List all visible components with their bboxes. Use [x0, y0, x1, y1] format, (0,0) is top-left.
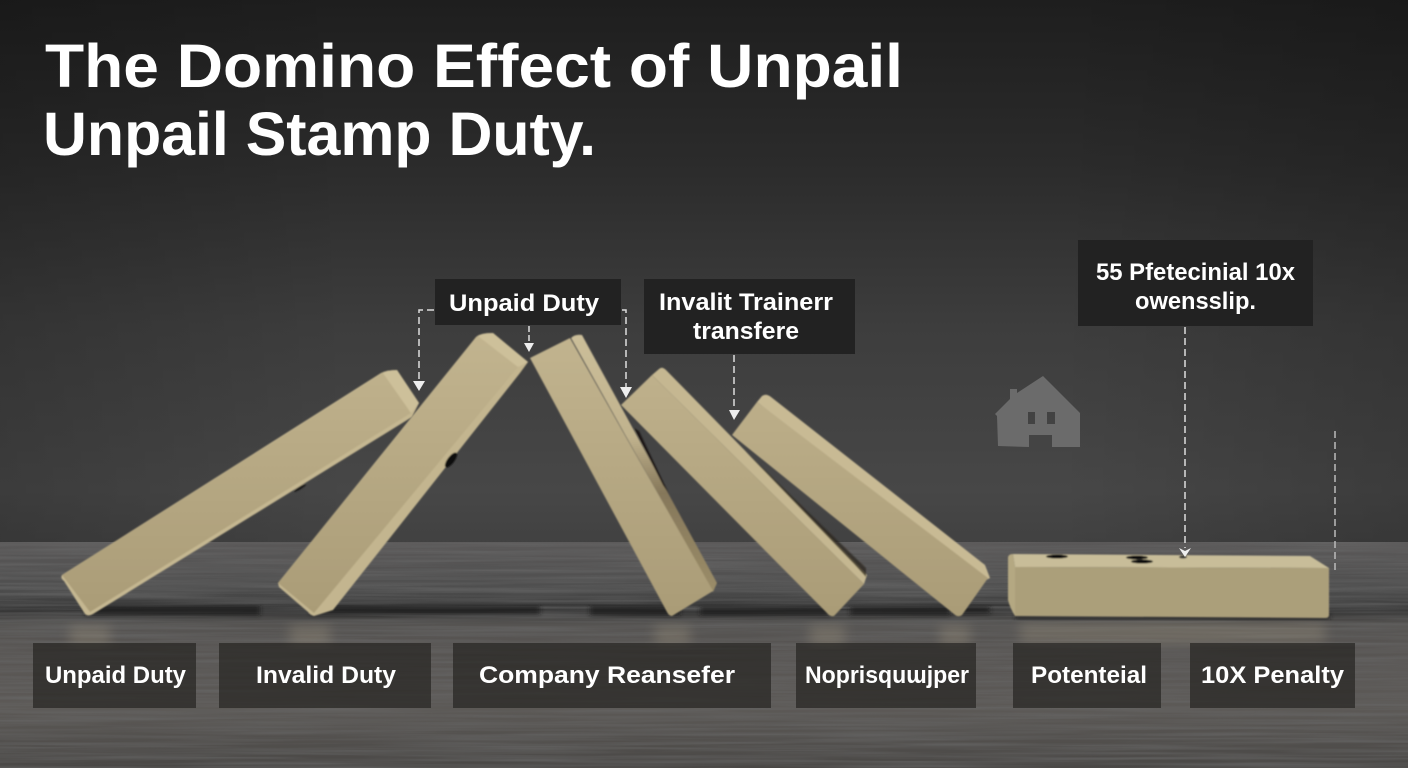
- title: Unpail Stamp Duty.: [43, 100, 596, 168]
- callout: 55 Pfetecinial 10x owensslip: owensslip.: [1135, 288, 1256, 315]
- label: Potenteial: [1013, 643, 1161, 708]
- title: The Domino Effect of Unpail: [45, 32, 903, 100]
- domino 2: [278, 333, 528, 616]
- callout: Invalit Trainerr transfere: Invalit Trainerr: [659, 289, 833, 316]
- label: Company Reansefer: Company Reansefer: [479, 662, 735, 689]
- label: 10X Penalty: 10X Penalty: [1201, 662, 1345, 689]
- callout: 55 Pfetecinial 10x owensslip: [1078, 240, 1313, 326]
- label: Unpaid Duty: [33, 643, 196, 708]
- label: Potenteial: Potenteial: [1031, 662, 1147, 689]
- arrow: callout to flat domino: [1179, 327, 1191, 557]
- domino 5: [732, 395, 990, 616]
- dashed marker line: [1334, 431, 1336, 571]
- arrow: callout to domino 5: [729, 355, 740, 420]
- title: [43, 32, 903, 168]
- label: Company Reansefer: [453, 643, 771, 708]
- table surface: [0, 542, 1408, 768]
- domino 4: [621, 368, 867, 616]
- callout: 55 Pfetecinial 10x owensslip: 55 Pfetecinial 10x: [1096, 259, 1296, 286]
- arrow: callout to domino 2: [524, 326, 534, 352]
- label: 10X Penalty: [1190, 643, 1355, 708]
- label: Invalid Duty: [219, 643, 431, 708]
- callout: Unpaid Duty: [435, 279, 621, 325]
- callout: Unpaid Duty: Unpaid Duty: [449, 290, 600, 317]
- background wall: [0, 0, 1408, 545]
- callout: Invalit Trainerr transfere: [644, 279, 855, 354]
- label: Unpaid Duty: Unpaid Duty: [45, 662, 187, 689]
- domino reflections on table: [70, 623, 1325, 647]
- domino shadows on table: [85, 606, 1330, 619]
- label: Noprisquɯjper: Noprisquɯjper: [805, 662, 969, 689]
- flat domino: [1008, 554, 1329, 618]
- domino 3: [530, 335, 717, 616]
- label: Noprisquɯjper: [796, 643, 976, 708]
- callout: Invalit Trainerr transfere: transfere: [693, 318, 799, 345]
- domino 1: [61, 370, 419, 616]
- arrow: callout to domino 1: [413, 310, 434, 391]
- icon: house: [995, 376, 1080, 447]
- label: Invalid Duty: Invalid Duty: [256, 662, 397, 689]
- arrow: callout to domino 3: [620, 310, 632, 398]
